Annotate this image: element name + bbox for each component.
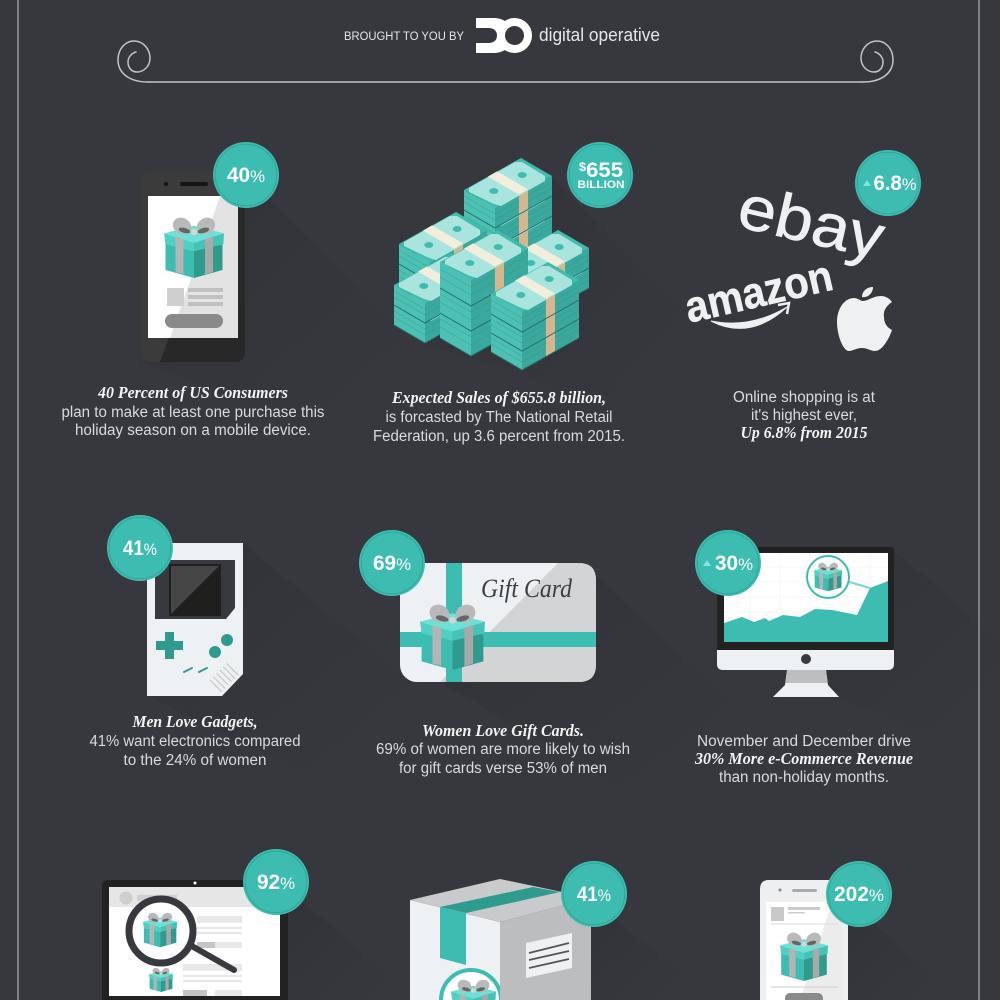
badge: $655 billion: $ — [579, 160, 586, 174]
icon: desktop monitor with chart — [717, 547, 894, 697]
caption — [694, 733, 913, 786]
panel: women love gift cards — [359, 530, 740, 800]
icon: digital operative logo — [476, 18, 528, 53]
badge: up 30%: 30% — [715, 552, 753, 575]
icon: amazon logo: amazon — [680, 251, 837, 333]
caption: is forcasted by The National Retail — [386, 409, 612, 426]
badge: 69%: 69% — [373, 552, 411, 575]
badge: $655 billion — [567, 142, 633, 208]
caption: Federation, up 3.6 percent from 2015. — [373, 428, 625, 445]
long shadow — [773, 550, 1000, 760]
badge: 92% — [243, 849, 309, 915]
icon: smartphone — [141, 171, 245, 362]
icon: stacks of money — [394, 158, 589, 370]
long shadow — [147, 543, 420, 780]
long shadow — [425, 177, 680, 440]
caption: 30% More e-Commerce Revenue — [694, 749, 913, 768]
icon: cardboard box — [410, 879, 591, 1000]
caption: Men Love Gadgets, — [132, 712, 258, 731]
caption: to the 24% of women — [124, 752, 266, 769]
badge: 41%: 41% — [577, 883, 611, 906]
icon: handheld game console — [147, 543, 243, 696]
badge: 40% — [213, 142, 279, 208]
brand name: digital operative — [539, 25, 660, 45]
badge: 40%: 40% — [227, 164, 265, 187]
panel: e-commerce revenue — [694, 530, 1000, 786]
panel: expected sales — [373, 142, 680, 445]
panel: shipping box — [410, 861, 627, 1000]
caption: 40 Percent of US Consumers — [97, 383, 288, 402]
badge: 41%: 41% — [123, 537, 157, 560]
icon: apple logo — [837, 287, 892, 351]
caption: holiday season on a mobile device. — [75, 422, 311, 439]
caption — [373, 388, 625, 445]
caption: it's highest ever, — [751, 407, 857, 424]
caption: Up 6.8% from 2015 — [740, 423, 868, 442]
decorative scroll divider — [118, 41, 893, 82]
caption: 41% want electronics compared — [90, 733, 300, 750]
caption — [90, 712, 300, 769]
badge: $655 billion: 655 — [586, 159, 623, 182]
caption: Women Love Gift Cards. — [422, 721, 584, 740]
badge: up 6.8% — [855, 150, 921, 216]
caption: than non-holiday months. — [719, 769, 889, 786]
badge: 69% — [359, 530, 425, 596]
badge: 41% — [561, 861, 627, 927]
long shadow — [591, 898, 700, 1000]
caption — [62, 383, 325, 439]
badge: 202% — [826, 861, 892, 927]
caption — [376, 721, 630, 777]
badge: up 6.8%: 6.8% — [874, 172, 916, 195]
long shadow — [440, 570, 740, 800]
panel: research online — [102, 849, 420, 1000]
caption — [733, 389, 876, 442]
panel: online shopping — [680, 150, 921, 442]
long shadow — [141, 172, 420, 440]
badge: $655 billion: BILLION — [577, 179, 625, 191]
panel: men love gadgets — [90, 515, 420, 780]
caption: Expected Sales of $655.8 billion, — [391, 388, 606, 407]
badge: 92%: 92% — [257, 871, 295, 894]
long shadow — [848, 900, 960, 1000]
caption: November and December drive — [697, 733, 911, 750]
caption: for gift cards verse 53% of men — [399, 760, 607, 777]
caption: Online shopping is at — [733, 389, 876, 406]
icon: ebay logo: ebay — [732, 172, 891, 273]
icon: white smartphone — [760, 880, 848, 1000]
caption: plan to make at least one purchase this — [62, 404, 325, 421]
long shadow — [288, 890, 420, 1000]
panel: mobile purchases — [62, 142, 420, 440]
panel: mobile growth — [760, 861, 960, 1000]
header: brought to you by — [344, 18, 660, 53]
badge: up 30% — [695, 530, 761, 596]
badge: 41% — [107, 515, 173, 581]
icon: gift card — [400, 563, 596, 682]
icon: gift card: Gift Card — [481, 574, 573, 603]
badge: 202%: 202% — [834, 883, 884, 906]
icon: laptop with magnifier — [102, 880, 288, 1000]
sponsor label: BROUGHT TO YOU BY — [344, 31, 464, 43]
caption: 69% of women are more likely to wish — [376, 741, 630, 758]
